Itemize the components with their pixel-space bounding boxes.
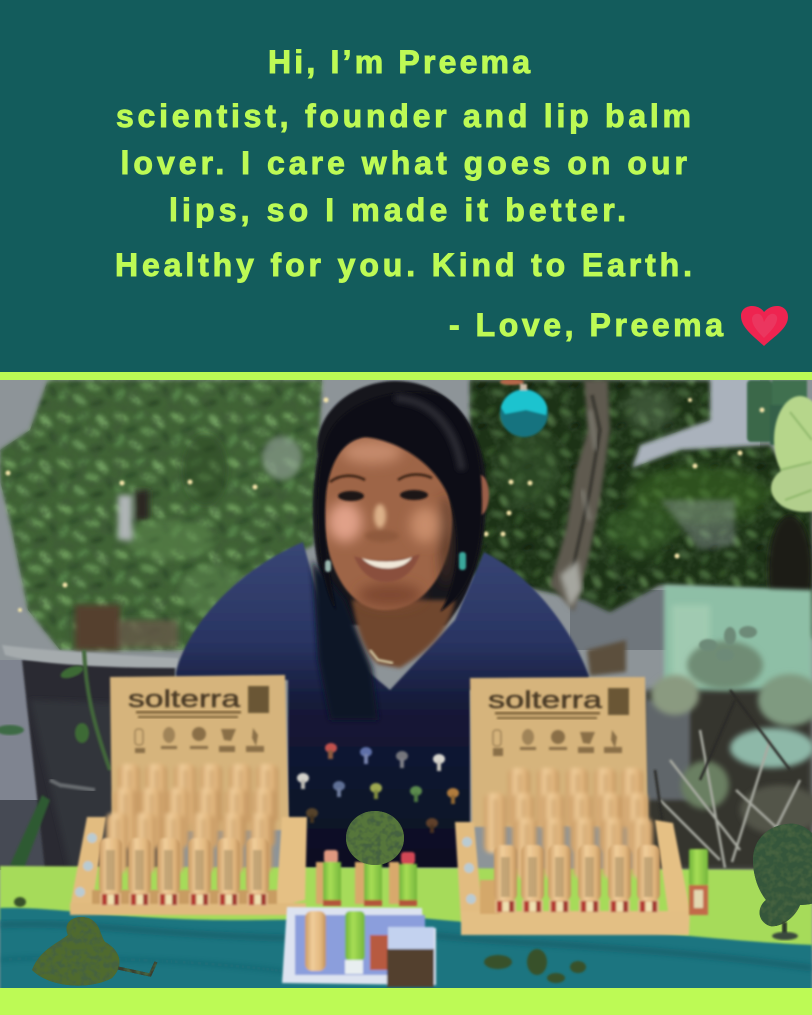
right board icons <box>493 729 622 756</box>
left tray front row of balms <box>99 838 269 906</box>
left board tagline <box>136 711 241 718</box>
bio line 1: scientist, founder and lip balm <box>116 98 691 134</box>
turquoise earrings <box>325 552 466 572</box>
right bare branches and succulents <box>645 626 812 870</box>
bio line 2: lover. I care what goes on our <box>120 145 687 181</box>
signature: - Love, Preema <box>449 307 723 343</box>
eyes and brows <box>330 474 432 501</box>
founder portrait <box>176 381 589 868</box>
bio line 3: lips, so I made it better. <box>169 192 626 228</box>
sweater mushroom print <box>297 743 459 833</box>
cactus <box>747 380 807 445</box>
lime green tablecloth <box>0 866 812 950</box>
right stand board <box>470 677 648 827</box>
neck <box>352 600 455 668</box>
left board icons <box>135 727 264 753</box>
smile <box>354 554 420 582</box>
teal fabric runner <box>0 908 812 990</box>
fairy lights <box>6 398 764 612</box>
right garden: dark shrubs and trunk <box>470 375 812 650</box>
nose <box>365 504 399 542</box>
centre foliage miniature tree <box>346 811 404 865</box>
navy sweater <box>176 542 589 868</box>
teal ornament ball <box>500 379 548 437</box>
right tray back rows of balms <box>484 768 653 878</box>
greeting heading: Hi, I’m Preema <box>268 44 530 80</box>
right board logo: solterra <box>488 687 603 714</box>
hair back <box>313 381 486 625</box>
left board logo: solterra <box>128 686 241 713</box>
left plant foliage <box>0 375 330 660</box>
necklace <box>370 650 393 663</box>
display: left solterra stand <box>70 675 307 915</box>
lime divider band <box>0 372 812 380</box>
small moss clumps <box>14 897 586 983</box>
hair falling over sweater <box>312 560 378 720</box>
icon: red heart <box>741 306 788 346</box>
photo background: wall and garden <box>0 380 812 988</box>
product leaflet card <box>282 907 436 987</box>
small wooden block <box>387 949 434 987</box>
tagline: Healthy for you. Kind to Earth. <box>115 247 692 283</box>
right wooden tray <box>455 820 690 935</box>
right tray front row of balms <box>494 845 660 913</box>
left stand board <box>110 675 289 832</box>
left board qr code <box>248 686 269 713</box>
intro text block <box>115 44 723 343</box>
left wooden tray <box>70 817 307 915</box>
ear <box>480 474 490 516</box>
face <box>323 434 452 610</box>
succulent <box>771 396 812 512</box>
bottom lime band <box>0 988 812 1015</box>
photo: founder at market stall <box>0 375 812 990</box>
display: right solterra stand <box>455 677 690 935</box>
right miniature tree <box>753 824 812 940</box>
front hair <box>318 392 482 612</box>
left dark planter <box>0 645 178 870</box>
right board tagline <box>495 712 600 719</box>
header panel background <box>0 0 812 372</box>
left tray back rows of balms <box>106 764 278 873</box>
right pale green planters <box>584 582 812 692</box>
right board qr code <box>608 688 629 715</box>
left miniature tree on fabric <box>32 917 156 986</box>
loose green lip balms <box>316 849 708 915</box>
